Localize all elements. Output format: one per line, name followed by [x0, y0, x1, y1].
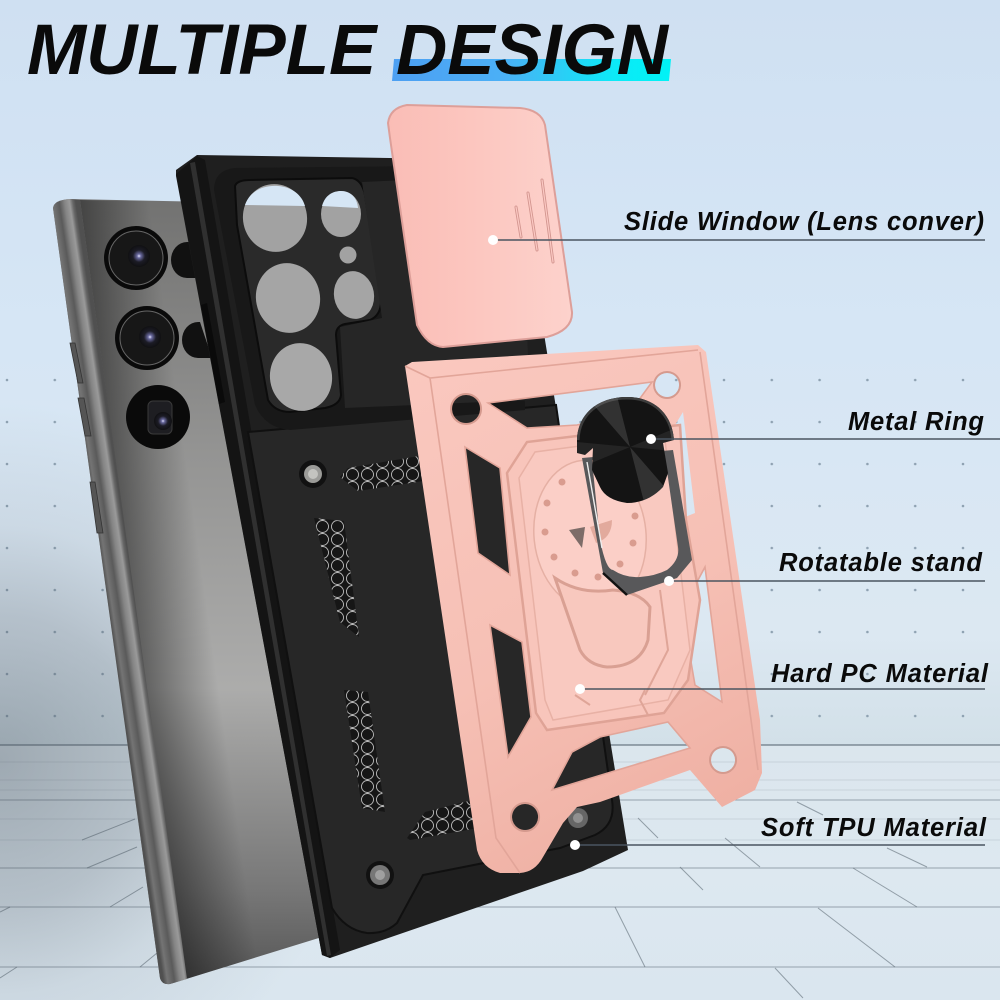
- case left edge: [176, 156, 340, 958]
- mesh vents: [314, 455, 490, 840]
- case back panel: [248, 405, 613, 933]
- metal ring: [570, 388, 692, 595]
- title highlight bar: [392, 59, 671, 81]
- callout: rotatable stand: [664, 549, 985, 586]
- background floor: [0, 745, 1000, 1000]
- case side button: [201, 303, 225, 404]
- rotating dial: [526, 455, 654, 615]
- callout: rotatable stand: Rotatable stand: [779, 549, 983, 577]
- ring loop: [582, 450, 692, 595]
- phone side buttons: [70, 343, 103, 533]
- callout: metal ring: Metal Ring: [848, 408, 984, 436]
- case screws: [299, 460, 588, 889]
- phone back: [53, 199, 400, 984]
- callout: hard PC material: [575, 660, 989, 694]
- phone lens: middle: [115, 306, 179, 370]
- phone lens: bottom: [126, 385, 190, 449]
- title: MULTIPLE DESIGN: [27, 11, 670, 90]
- frame hole rims: [451, 372, 736, 831]
- phone lens: top: [104, 226, 168, 290]
- callout: metal ring: [646, 408, 1000, 444]
- callout: slide window: [488, 208, 985, 245]
- kickstand recess: [555, 578, 650, 667]
- callout: soft TPU material: [570, 814, 987, 850]
- callout: slide window: Slide Window (Lens conver): [624, 208, 984, 236]
- center octagon rim: [507, 425, 700, 730]
- hard PC pink frame: [405, 345, 762, 873]
- soft TPU case: [176, 155, 628, 958]
- callout: soft TPU material: Soft TPU Material: [761, 814, 987, 842]
- phone side edge: [53, 199, 187, 984]
- callout: hard PC material: Hard PC Material: [771, 660, 989, 688]
- phone lenses behind case: [171, 242, 212, 358]
- background wall: [0, 0, 1000, 746]
- frame lower notches: [575, 590, 668, 715]
- slide grip ridges: [516, 180, 553, 262]
- camera holes: [237, 178, 378, 416]
- camera frame: [214, 165, 525, 430]
- slide window lens cover: [388, 105, 572, 347]
- floor and wall left shading: [0, 400, 400, 1000]
- frame bevels: [405, 350, 758, 873]
- ring disc: [577, 397, 674, 503]
